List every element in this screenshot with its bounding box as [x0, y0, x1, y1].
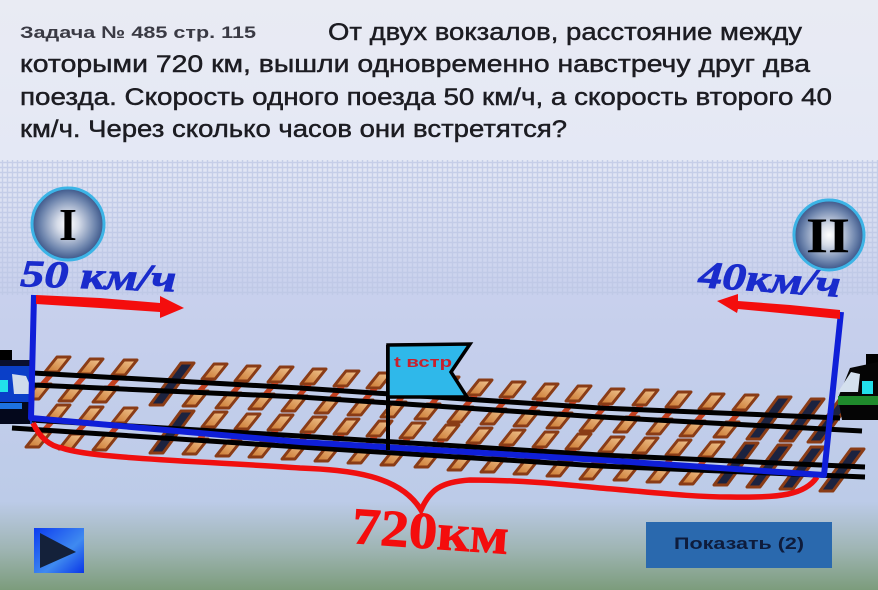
railway track upper: [26, 357, 862, 442]
railway track lower: [12, 405, 865, 491]
badge I: I: [59, 199, 77, 250]
show button: Показать (2): [674, 534, 804, 553]
badge II: II: [806, 207, 850, 263]
badge I: [32, 188, 104, 260]
badge II: [794, 200, 864, 270]
speed label II: 40км/ч: [696, 254, 842, 306]
arrow: train I direction: [36, 295, 184, 318]
arrow: train II direction: [717, 294, 840, 319]
train I: [0, 350, 33, 424]
train II: [838, 354, 878, 420]
problem line 2: которыми 720 км, вышли одновременно навстречу друг два: [20, 51, 811, 78]
problem statement text: [20, 19, 832, 143]
problem line 4: км/ч. Через сколько часов они встретятся?: [20, 116, 567, 143]
flag: meeting time: [388, 344, 470, 450]
task number: Задача № 485 стр. 115: [20, 23, 256, 42]
problem line 1: От двух вокзалов, расстояние между: [328, 19, 802, 46]
flag label: t встр: [394, 354, 452, 371]
blue distance line: [31, 295, 841, 475]
background grid texture: [0, 160, 878, 295]
play button: [34, 528, 84, 573]
distance label: 720км: [350, 498, 511, 566]
speed label I: 50 км/ч: [20, 253, 177, 300]
show button: [646, 522, 832, 568]
problem line 3: поезда. Скорость одного поезда 50 км/ч, а скорость второго 40: [20, 84, 832, 111]
red brace 720 km: [33, 423, 817, 510]
